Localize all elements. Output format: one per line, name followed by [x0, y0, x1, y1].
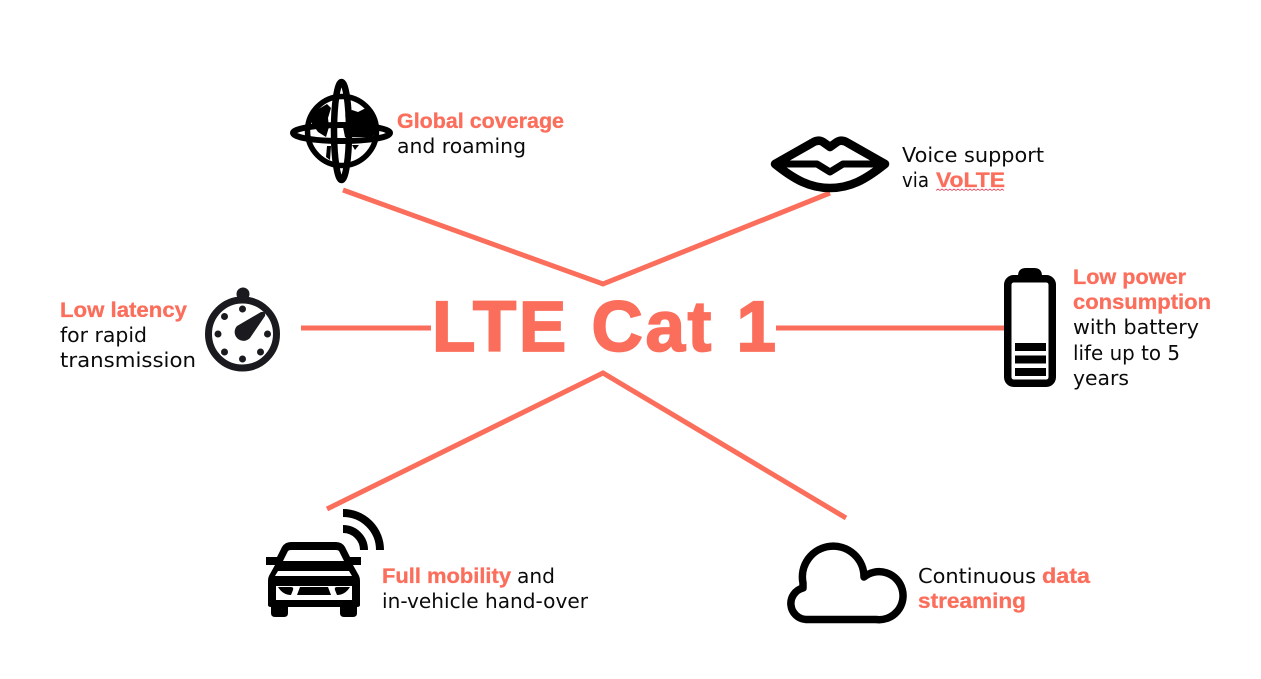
text: voice support: via [902, 168, 929, 192]
text: full mobility: and [517, 564, 555, 588]
text: low latency: transmission [60, 348, 196, 372]
icon: battery [1008, 268, 1052, 383]
connector lines [301, 190, 1006, 518]
text: low power consumption: with battery [1073, 315, 1199, 339]
text: voice support: Voice support [902, 143, 1044, 167]
icon: cloud [791, 546, 903, 620]
title: LTE Cat 1 [432, 288, 776, 367]
icon: lips [775, 141, 885, 188]
text: data streaming [918, 564, 1091, 613]
text: global coverage: and roaming [397, 134, 526, 158]
text: low power consumption: Low power [1073, 265, 1187, 289]
icon: stopwatch [208, 288, 276, 368]
text: voice support: VoLTE [936, 168, 1005, 192]
text: low power consumption: years [1073, 366, 1129, 390]
text: low power consumption: consumption [1073, 290, 1211, 314]
text: data streaming: streaming [918, 589, 1026, 613]
icon: globe [293, 82, 390, 180]
text: global coverage: Global coverage [397, 109, 564, 133]
text: low latency: Low latency [60, 298, 187, 322]
text: data streaming: Continuous [918, 564, 1036, 588]
text: low latency: for rapid [60, 323, 147, 347]
text: global coverage [397, 109, 564, 158]
icon: car with signal [266, 513, 380, 617]
text: full mobility [382, 564, 589, 613]
text: data streaming: data [1042, 564, 1091, 588]
text: low power consumption [1073, 265, 1211, 390]
text: low latency [60, 298, 196, 372]
text: low power consumption: life up to 5 [1073, 341, 1180, 365]
text: full mobility: in-vehicle hand-over [382, 589, 589, 613]
text: voice support [902, 143, 1044, 192]
text: full mobility: Full mobility [382, 564, 511, 588]
